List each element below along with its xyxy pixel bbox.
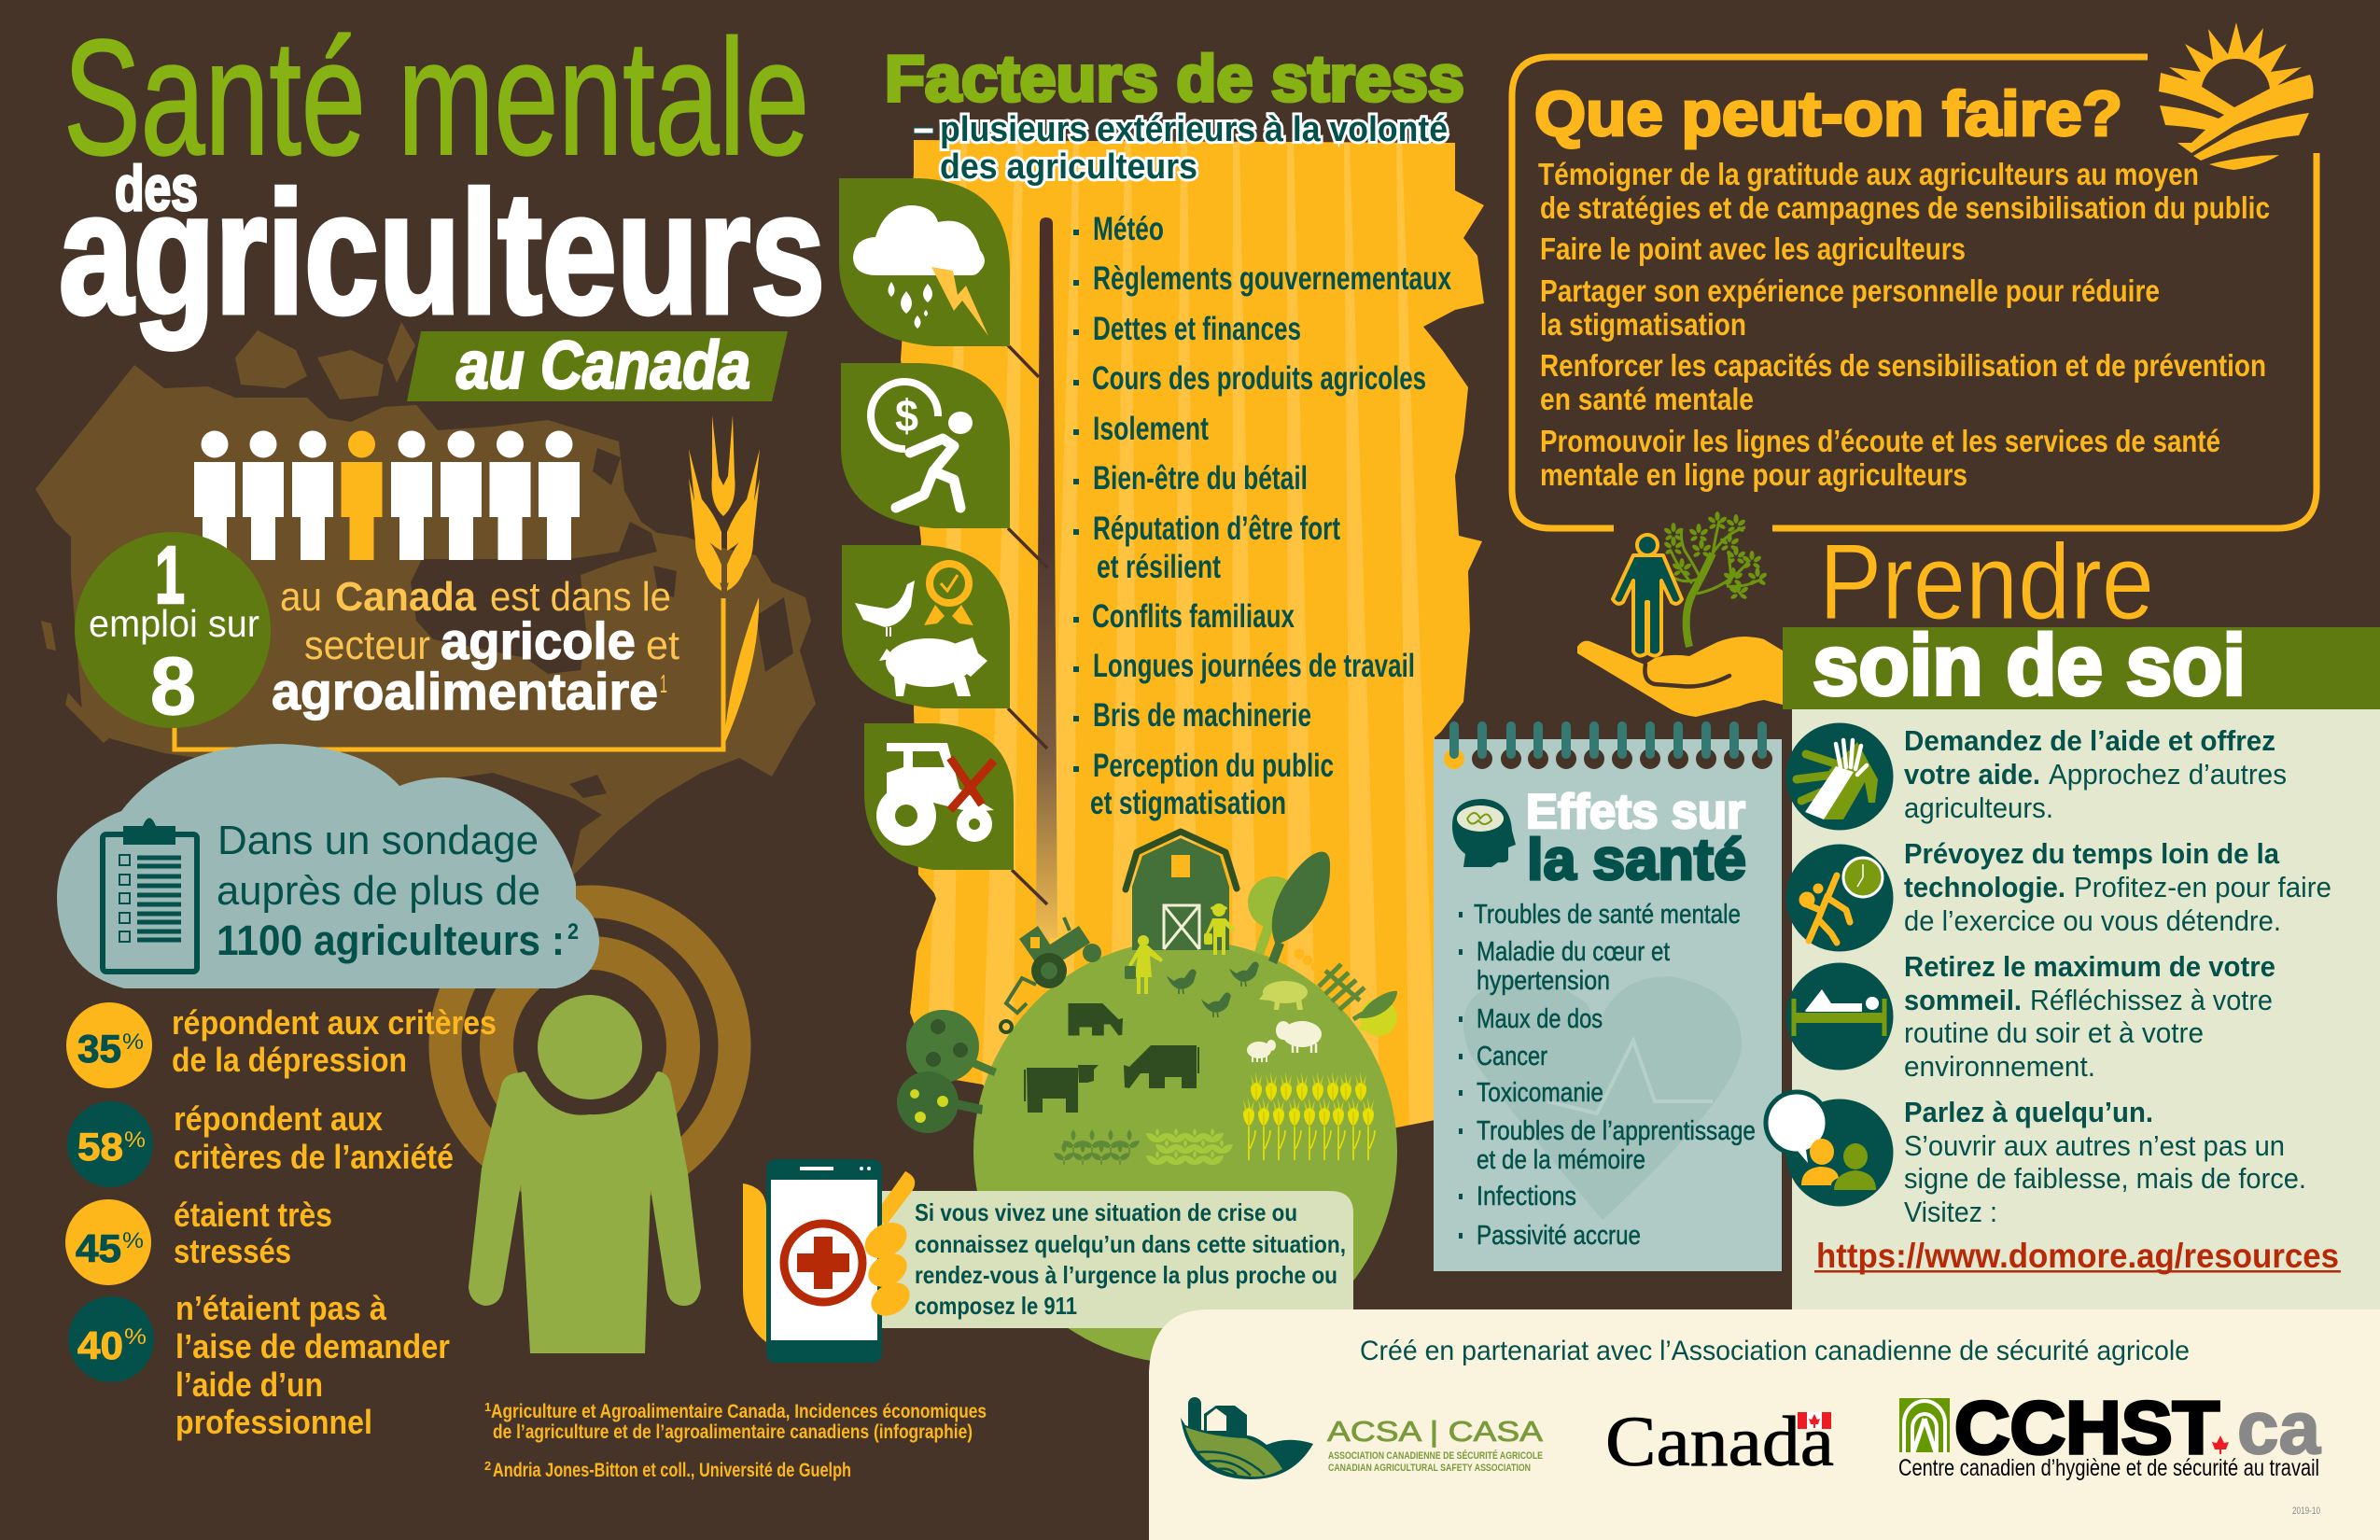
tip 2: Prévoyez du temps: de l’exercice ou vous détendre.	[1904, 904, 2281, 937]
stat: 58%: critères de l’anxiété	[174, 1138, 454, 1176]
stat: 35%: 35	[77, 1027, 121, 1071]
footnotes	[484, 1400, 987, 1481]
cloud: survey: auprès de plus de	[217, 868, 540, 914]
text: au Canada est dans le secteur agricole et agroalimentaire: Canada	[335, 574, 476, 620]
crops	[1054, 1129, 1140, 1165]
callout: crisis message: connaissez quelqu’un dans cette situation,	[915, 1230, 1346, 1258]
icon: clock and active figures	[1786, 844, 1893, 952]
callout: crisis message	[882, 1191, 1353, 1328]
icon: two people talking	[1766, 1092, 1893, 1206]
tractor and plough	[1001, 917, 1101, 1032]
panel: Effets sur la santé notebook: Infections	[1477, 1182, 1576, 1211]
footnotes: 1	[484, 1400, 491, 1414]
stress factor list: et résilient	[1097, 549, 1221, 585]
stat: 58%: répondent aux	[174, 1099, 383, 1138]
logo: Canada wordmark: Canada	[1605, 1403, 1834, 1481]
tip 4: Parlez à quelqu'un: Parlez à quelqu’un.	[1904, 1096, 2153, 1128]
stat: 40%: l’aide d’un	[175, 1365, 323, 1404]
stat: 45%: 45	[76, 1226, 121, 1270]
leaf: broken tractor icon	[864, 723, 1014, 870]
icon: wheat	[689, 415, 760, 747]
cows	[1025, 1003, 1198, 1113]
panel: Effets sur la santé notebook: Maux de dos	[1477, 1004, 1603, 1034]
callout: crisis message: composez le 911	[915, 1292, 1077, 1320]
heading: Prendre: Prendre	[1819, 523, 2154, 642]
title: Santé mentale des agriculteurs	[59, 7, 825, 350]
tip 4: Parlez à quelqu'un	[1766, 1092, 2306, 1228]
logo: ACSA CASA: ASSOCIATION CANADIENNE DE SÉCURITÉ AGRICOLE	[1328, 1449, 1543, 1462]
cloud: survey	[57, 744, 599, 988]
stat: 40%: professionnel	[175, 1403, 372, 1441]
stress factor list: et stigmatisation	[1090, 785, 1286, 821]
stat: 58%: 58	[77, 1125, 123, 1169]
heading: Facteurs de stress: des agriculteurs	[940, 147, 1197, 187]
heading: Facteurs de stress: plusieurs extérieurs à la volonté	[940, 110, 1448, 149]
map of Canada	[35, 322, 816, 879]
tip 4: Parlez à quelqu'un: Visitez :	[1904, 1196, 1997, 1228]
vertical timeline bar	[1036, 217, 1057, 938]
yellow wheat field panel	[901, 140, 1484, 1148]
banner: soin de soi: soin de soi	[1813, 618, 2246, 713]
right small tree	[1353, 991, 1397, 1036]
leaf: money and runner icon: $	[895, 392, 918, 441]
panel: Effets sur la santé notebook: Troubles de santé mentale	[1474, 900, 1741, 930]
stat: 40%: n’étaient pas à	[175, 1289, 387, 1327]
text: au Canada est dans le secteur agricole et agroalimentaire: agricole	[441, 611, 636, 670]
tip 4: Parlez à quelqu'un: S’ouvrir aux autres n’est pas un	[1904, 1129, 2285, 1162]
stress factor list	[1073, 211, 1451, 821]
poultry	[1169, 962, 1258, 1017]
text: au Canada est dans le secteur agricole et agroalimentaire: 1	[660, 669, 667, 698]
stress factor list: Dettes et finances	[1093, 311, 1301, 347]
panel: Effets sur la santé notebook: Cancer	[1477, 1042, 1547, 1071]
logo: CCHST.ca: ca	[2237, 1386, 2321, 1469]
stress factor list: Bien-être du bétail	[1093, 460, 1308, 497]
icon: person figure	[469, 995, 701, 1353]
footnotes: Agriculture et Agroalimentaire Canada, Incidences économiques	[491, 1401, 987, 1422]
logo: ACSA CASA: ACSA | CASA	[1327, 1415, 1543, 1448]
stress factor list: Longues journées de travail	[1093, 648, 1415, 684]
footnotes: 2	[484, 1459, 491, 1473]
icon: clipboard	[103, 818, 197, 972]
text: au Canada est dans le secteur agricole et agroalimentaire: secteur	[304, 623, 430, 668]
panel: Effets sur la santé notebook: Toxicomanie	[1477, 1078, 1603, 1108]
tip 3: Retirez le maximum: sommeil.	[1904, 984, 2022, 1016]
bracket around statistic	[175, 598, 723, 749]
date code: 2019-10	[2292, 1505, 2320, 1517]
stress factor list: Météo	[1093, 211, 1164, 247]
panel: Effets sur la santé notebook: Maladie du cœur et	[1477, 937, 1670, 967]
stat: 58%	[67, 1099, 454, 1187]
tip 1: Demandez de l'aide: Approchez d’autres	[2049, 758, 2287, 791]
concentric rings behind person	[445, 902, 735, 1191]
panel: Effets sur la santé notebook: et de la mémoire	[1477, 1145, 1645, 1175]
tip 3: Retirez le maximum	[1786, 950, 2275, 1083]
barn	[1126, 832, 1237, 950]
sheep	[1247, 1021, 1322, 1062]
text: au Canada est dans le secteur agricole et agroalimentaire: est dans le	[490, 574, 671, 620]
tip 4: Parlez à quelqu'un: signe de faiblesse, mais de force.	[1904, 1162, 2306, 1195]
panel: Effets sur la santé notebook: Troubles de l’apprentissage	[1477, 1116, 1756, 1146]
tip 1: Demandez de l'aide: votre aide.	[1904, 758, 2040, 791]
panel: Que peut-on faire: Promouvoir les lignes d’écoute et les services de santé	[1540, 424, 2220, 458]
icon: helping hands	[1786, 722, 1893, 831]
tip 1: Demandez de l'aide: agriculteurs.	[1904, 791, 2053, 824]
panel: Que peut-on faire: en santé mentale	[1540, 382, 1754, 416]
pig	[1259, 981, 1308, 1010]
icon: phone in hand	[743, 1159, 916, 1363]
heading: Facteurs de stress	[885, 42, 1464, 187]
stat: 58%: %	[124, 1127, 146, 1153]
panel: partners footer: Créé en partenariat avec l’Association canadienne de sécurité agricole	[1360, 1336, 2190, 1366]
title: Santé mentale des agriculteurs: agriculteurs	[59, 157, 825, 350]
icon: person and tree on hand	[1577, 511, 1783, 717]
stat: 40%: l’aise de demander	[175, 1327, 450, 1365]
logo: ACSA CASA: CANADIAN AGRICULTURAL SAFETY ASSOCIATION	[1328, 1463, 1531, 1474]
banner: au Canada: au Canada	[456, 329, 750, 403]
stat: 35%: de la dépression	[172, 1041, 407, 1079]
stat: 35%	[66, 1002, 497, 1088]
stat: 40%	[68, 1289, 450, 1441]
heart watermark	[1463, 976, 1742, 1220]
tip 2: Prévoyez du temps: Profitez-en pour faire	[2074, 871, 2331, 903]
text: au Canada est dans le secteur agricole et agroalimentaire: et	[646, 623, 679, 668]
tip 3: Retirez le maximum: environnement.	[1904, 1050, 2095, 1083]
tip 1: Demandez de l'aide	[1786, 722, 2287, 831]
logo: ACSA CASA	[1181, 1397, 1543, 1479]
panel: partners footer	[1149, 1309, 2380, 1540]
stat: 45%: étaient très	[174, 1196, 332, 1234]
stress factor list: Cours des produits agricoles	[1092, 360, 1426, 397]
callout: crisis message: Si vous vivez une situation de crise ou	[915, 1198, 1297, 1226]
tip 2: Prévoyez du temps: technologie.	[1904, 871, 2065, 903]
farmers	[1125, 903, 1236, 994]
panel: Que peut-on faire: Témoigner de la gratitude aux agriculteurs au moyen	[1538, 157, 2199, 191]
text: au Canada est dans le secteur agricole et agroalimentaire: agroalimentaire	[272, 662, 658, 721]
text: au Canada est dans le secteur agricole et agroalimentaire	[272, 574, 679, 721]
stat: 35%: répondent aux critères	[172, 1003, 497, 1042]
stat: 45%: %	[122, 1228, 144, 1253]
title: Santé mentale des agriculteurs: Santé mentale	[63, 7, 809, 189]
stat circle: 1 emploi sur 8: 1	[155, 530, 185, 621]
stress factor list: Perception du public	[1093, 748, 1334, 784]
link: domore.ag resources: https://www.domore.ag/resources	[1816, 1237, 2339, 1275]
stress factor list: Bris de machinerie	[1093, 697, 1311, 734]
leaf: money and runner icon	[841, 363, 1010, 528]
panel: Que peut-on faire: Que peut-on faire?	[1534, 78, 2122, 149]
footnotes: de l’agriculture et de l’agroalimentaire canadiens (infographie)	[493, 1421, 973, 1443]
panel: Effets sur la santé notebook: Passivité accrue	[1477, 1221, 1641, 1251]
cloud: survey: Dans un sondage	[217, 818, 539, 863]
connector lines	[1008, 345, 1047, 904]
panel: Que peut-on faire	[1512, 57, 2317, 528]
panel: Que peut-on faire: Faire le point avec les agriculteurs	[1540, 231, 1966, 266]
stat: 40%: %	[124, 1324, 147, 1350]
leaf: livestock and reputation icon	[842, 545, 1010, 708]
wheat field	[1243, 1071, 1375, 1160]
stat: 35%: %	[122, 1029, 144, 1055]
stat: 40%: 40	[77, 1323, 123, 1367]
logo: CCHST.ca: CCHST	[1954, 1386, 2219, 1469]
panel: Effets sur la santé notebook: hypertension	[1477, 966, 1610, 996]
tip 2: Prévoyez du temps	[1786, 837, 2331, 952]
stat circle: 1 emploi sur 8	[75, 530, 271, 732]
panel: Que peut-on faire: mentale en ligne pour agriculteurs	[1540, 457, 1967, 492]
icon: head with tangled thoughts	[1452, 799, 1516, 867]
tip 3: Retirez le maximum: Réfléchissez à votre	[2030, 984, 2273, 1016]
cloud: survey: 2	[567, 919, 579, 945]
text: au Canada est dans le secteur agricole et agroalimentaire: au	[280, 574, 322, 620]
panel: Que peut-on faire: la stigmatisation	[1540, 307, 1746, 342]
panel: Effets sur la santé notebook	[1434, 726, 1782, 1271]
panel: self-care background	[1792, 709, 2380, 1316]
trees behind and right	[1248, 852, 1330, 964]
illustration: farm on hill	[897, 832, 1397, 1364]
tip 2: Prévoyez du temps: Prévoyez du temps loin de la	[1904, 837, 2280, 870]
stress factor list: Réputation d’être fort	[1093, 511, 1340, 547]
tip 3: Retirez le maximum: routine du soir et à votre	[1904, 1016, 2204, 1049]
panel: Que peut-on faire: Partager son expérience personnelle pour réduire	[1540, 273, 2160, 308]
tip 1: Demandez de l'aide: Demandez de l’aide et offrez	[1904, 724, 2275, 757]
tip 3: Retirez le maximum: Retirez le maximum de votre	[1904, 950, 2275, 983]
spiral binding	[1444, 726, 1772, 769]
icon: person in bed	[1786, 963, 1893, 1070]
title: Santé mentale des agriculteurs: des	[115, 153, 198, 224]
row of eight people	[194, 431, 580, 560]
stress factor list: Isolement	[1093, 411, 1209, 447]
stress factor list: Conflits familiaux	[1092, 598, 1295, 635]
heading: Facteurs de stress: Facteurs de stress	[885, 42, 1464, 115]
callout: crisis message: rendez-vous à l’urgence la plus proche ou	[915, 1261, 1337, 1289]
cloud: survey: 1100 agriculteurs :	[217, 917, 565, 964]
panel: Effets sur la santé notebook: Effets sur	[1526, 785, 1745, 839]
hill	[973, 940, 1397, 1364]
fence and flowers	[1295, 950, 1365, 1010]
logo: CCHST.ca	[1898, 1386, 2321, 1481]
panel: Que peut-on faire: Renforcer les capacités de sensibilisation et de prévention	[1540, 348, 2266, 383]
footnotes: Andria Jones-Bitton et coll., Université de Guelph	[493, 1460, 851, 1481]
panel: Que peut-on faire: de stratégies et de campagnes de sensibilisation du public	[1540, 190, 2270, 225]
stat circle: 1 emploi sur 8: emploi sur	[89, 602, 259, 645]
stat circle: 1 emploi sur 8: 8	[150, 641, 196, 732]
apple trees	[897, 1010, 997, 1133]
icon: sun over fields	[2159, 22, 2314, 170]
stat: 45%: stressés	[174, 1232, 291, 1270]
stress factor list: Règlements gouvernementaux	[1093, 260, 1451, 297]
panel: Effets sur la santé notebook: la santé	[1527, 828, 1746, 892]
leaf: weather icon	[839, 178, 1010, 346]
stat: 45%	[65, 1196, 332, 1285]
